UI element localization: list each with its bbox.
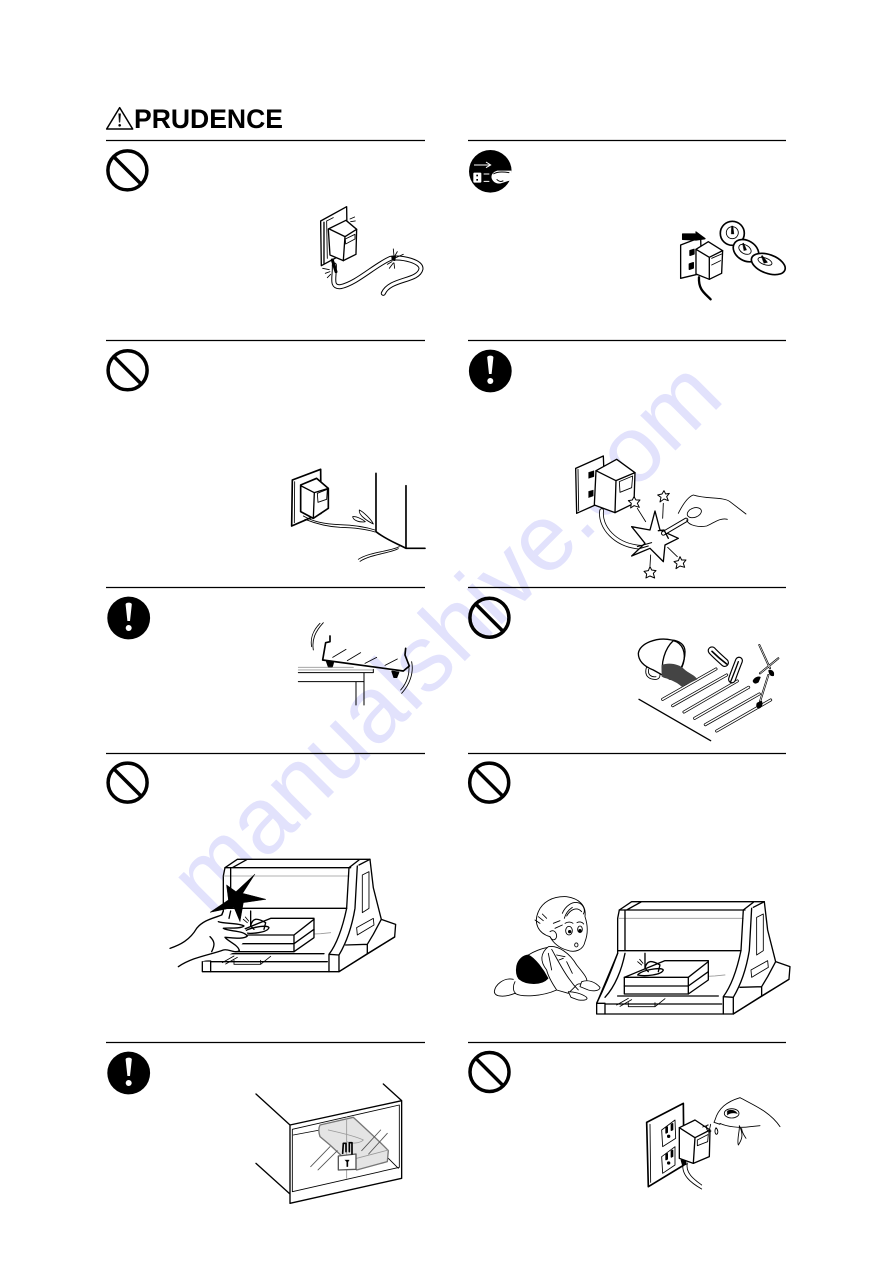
illustration: unplug adapter, discs [681,221,788,299]
panel: keep children away [468,754,790,1014]
icon: prohibition [470,1052,509,1092]
panel: keep fingers out of printer head [106,754,425,972]
panel: do not damage the cord [106,140,425,293]
illustration: wet hand on adapter [647,1098,780,1189]
title [107,104,283,134]
baby [494,897,600,1000]
illustration: printer tipping off table [298,623,412,705]
icon: prohibition [108,351,147,390]
icon: prohibition [470,763,509,802]
panel: lock printer away [106,1042,425,1203]
panel: do not short circuit the cord [468,340,786,578]
panel: unplug and discs [468,140,788,299]
icon: prohibition [108,151,147,190]
icon: unplug [469,150,512,193]
icon: prohibition [470,598,509,637]
illustration: baby near printer [494,897,790,1014]
illustration: printer with injured hand [202,859,396,972]
icon: prohibition [108,763,147,802]
star and hand [170,874,266,967]
icon: exclamation [107,1052,150,1094]
panel: no liquids or objects in printer [468,588,786,741]
illustration: spilled cup, clips and pins [638,639,778,741]
panel: printer must sit flat [106,588,425,705]
illustration: adapter with frayed cord [321,207,421,293]
illustration: printer in locked cabinet [256,1084,402,1203]
illustration: short circuit spark [576,456,746,578]
printer [597,902,790,1014]
panel: no wet hands [468,1042,786,1189]
icon: exclamation [469,350,512,392]
icon: warning triangle [107,108,133,129]
watermark: manualshive.com [149,340,740,931]
heading: PRUDENCE [134,104,283,134]
icon: exclamation [107,597,150,639]
printer [202,859,396,972]
illustration: cord under cabinet [292,469,425,561]
panel: cord pinched under furniture [106,340,425,561]
